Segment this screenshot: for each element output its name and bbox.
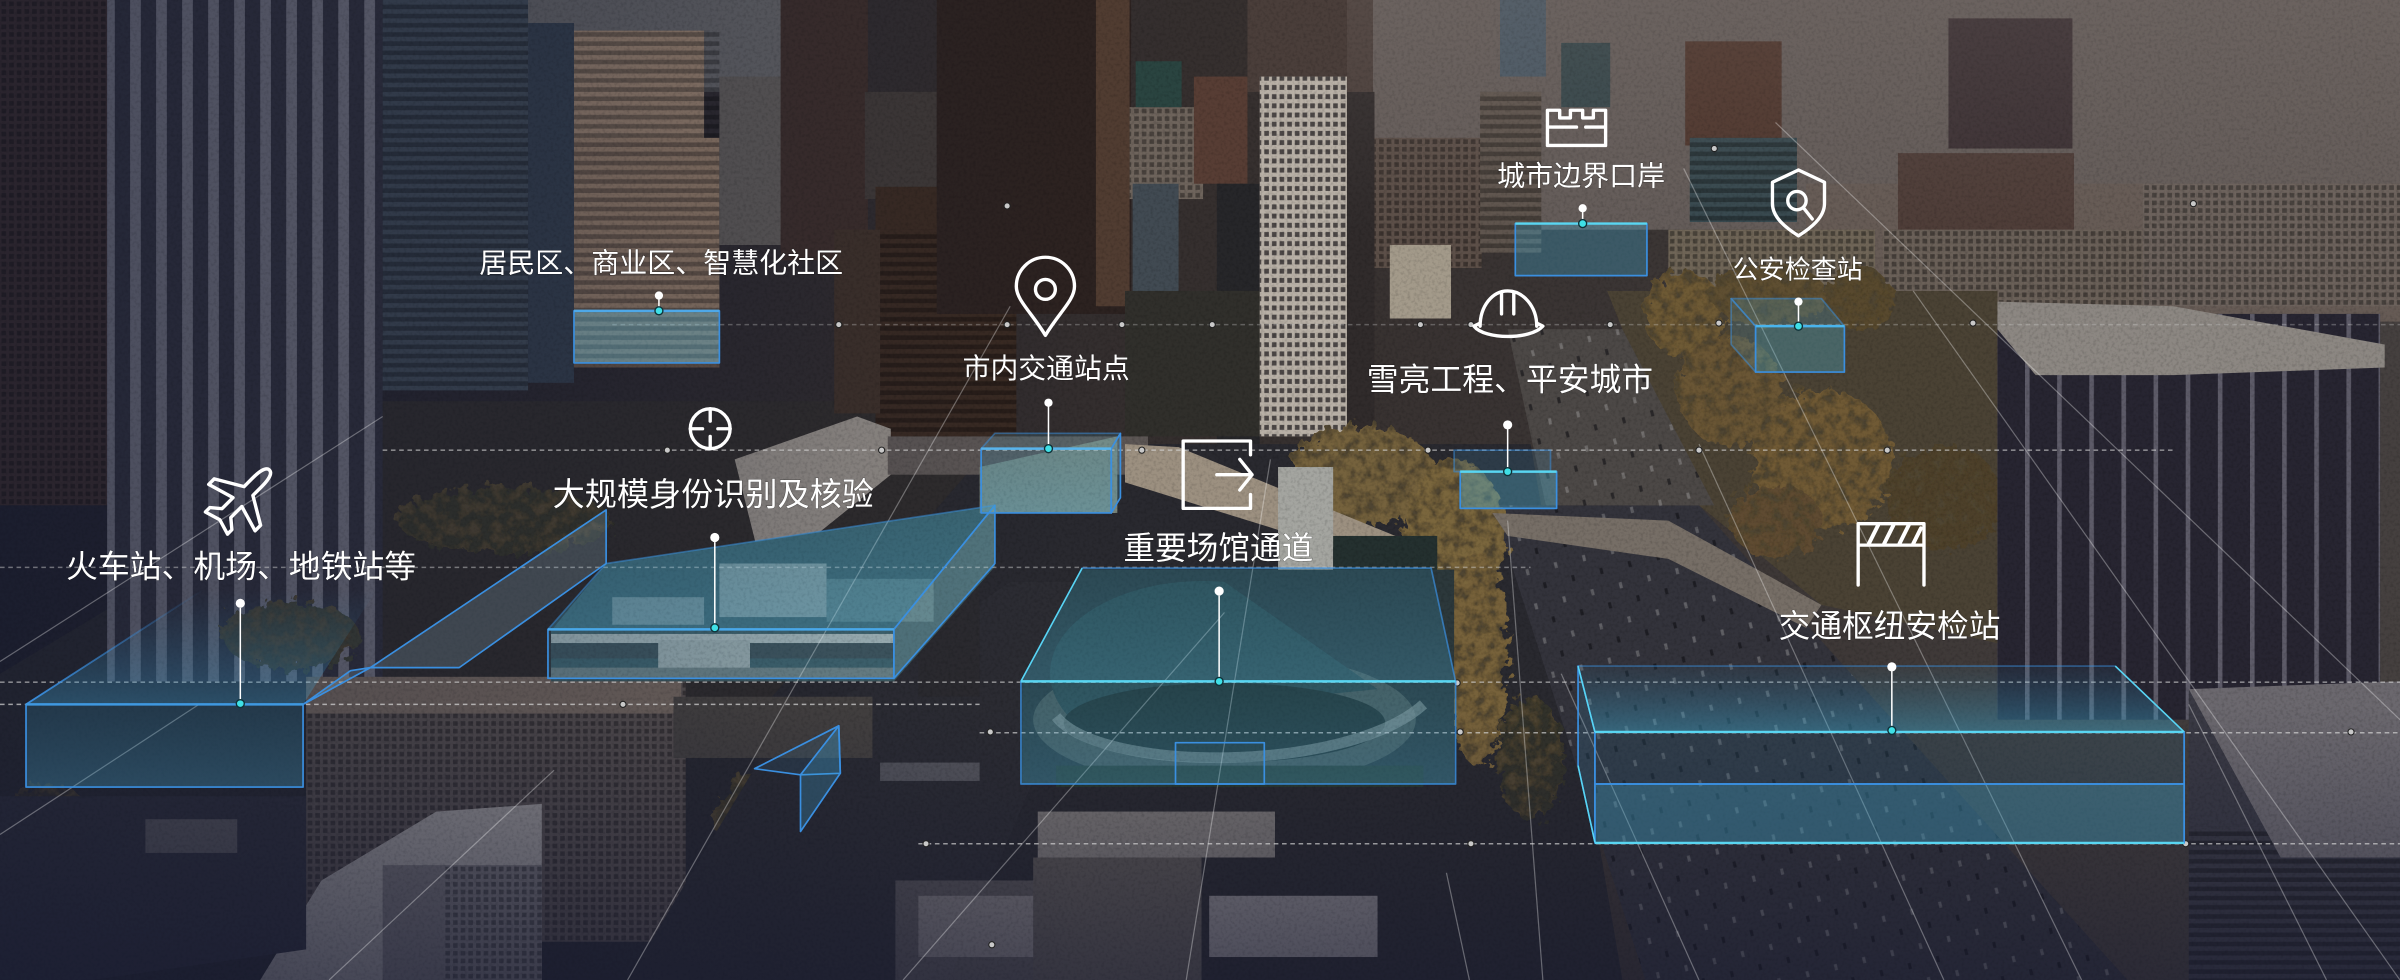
icon: exit door (1183, 441, 1252, 508)
icon: road barrier (1858, 524, 1924, 585)
leader line (1887, 662, 1896, 734)
callout: transport hub security station (1779, 524, 2000, 734)
freeway and trees (0, 263, 2128, 980)
box: walkway zone (755, 726, 840, 831)
icon: hard hat (1474, 291, 1543, 336)
leader line (710, 533, 719, 632)
label: 重要场馆通道 (1123, 530, 1313, 566)
icon: location pin (1016, 257, 1074, 335)
callout: rail, airport and metro (66, 447, 416, 708)
box: police checkpoint zone (1731, 299, 1844, 372)
callout: residential, commercial and smart community (479, 248, 843, 315)
leader line (1503, 420, 1512, 476)
mid and foreground buildings (0, 302, 2400, 980)
box: rail, airport and metro zone (26, 510, 606, 787)
dashed horizontal guide lines (0, 325, 2400, 844)
label: 雪亮工程、平安城市 (1367, 361, 1653, 397)
box: skynet project zone (1454, 450, 1557, 508)
box: city transit stop zone (981, 433, 1120, 513)
leader line (1215, 586, 1224, 685)
icon: shield with magnifier (1772, 170, 1824, 236)
leader line (1579, 204, 1587, 228)
label: 火车站、机场、地铁站等 (66, 548, 416, 584)
leader line (236, 599, 245, 708)
box: transport hub security zone (1578, 666, 2184, 843)
box: large-scale identity verification zone (548, 505, 995, 678)
callout: important venue passage (1123, 441, 1313, 685)
label: 大规模身份识别及核验 (553, 476, 874, 512)
icon: fortress wall (1547, 110, 1606, 145)
callout: police checkpoint (1733, 170, 1863, 330)
leader line (655, 291, 663, 315)
label: 居民区、商业区、智慧化社区 (479, 248, 843, 279)
leader line (1794, 298, 1803, 330)
leader line (1044, 399, 1053, 453)
callout: city transit stop (963, 257, 1130, 453)
label: 交通枢纽安检站 (1779, 608, 2000, 644)
icon: crosshair (690, 409, 730, 449)
label: 市内交通站点 (963, 353, 1130, 384)
small grid node dots (620, 145, 2354, 948)
box: city border port zone (1515, 224, 1647, 276)
box: residential and community zone (574, 311, 719, 363)
box: important venue passage (1021, 568, 1456, 784)
icon: airplane (193, 447, 293, 546)
callout: large-scale identity verification (553, 409, 874, 632)
label: 公安检查站 (1733, 255, 1863, 285)
skyline buildings (0, 0, 2400, 681)
callout: city border port (1497, 110, 1665, 228)
callout: skynet project and safe city (1367, 291, 1653, 476)
label: 城市边界口岸 (1497, 160, 1665, 191)
